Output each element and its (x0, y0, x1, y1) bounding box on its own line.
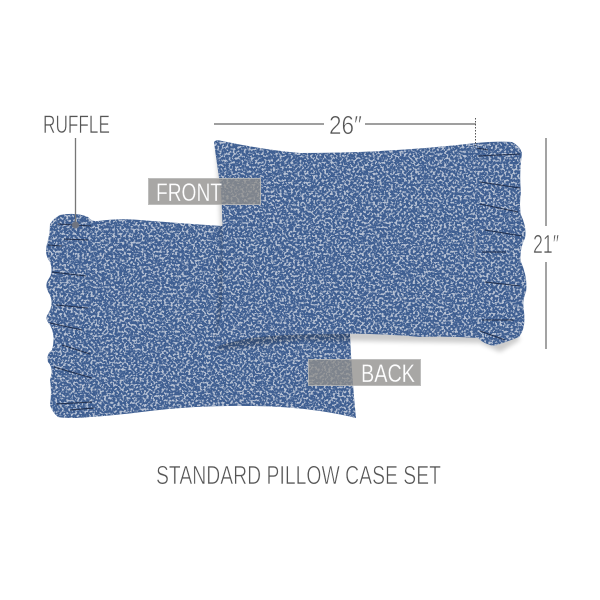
back label (308, 359, 421, 388)
ruffle callout: RUFFLE (43, 111, 110, 139)
ruffle pleats (477, 148, 522, 340)
width dimension 26 inches: 26″ (329, 110, 362, 140)
ruffle pleats (48, 224, 94, 410)
back label: BACK (361, 360, 415, 388)
ruffle callout (43, 111, 110, 228)
caption: STANDARD PILLOW CASE SET (156, 460, 441, 490)
front pillow (213, 140, 526, 348)
seam (474, 230, 476, 258)
front label: FRONT (156, 179, 222, 207)
front pillow shadow (216, 146, 520, 352)
back pillow (46, 214, 356, 418)
height dimension 21 inches: 21″ (533, 229, 559, 259)
